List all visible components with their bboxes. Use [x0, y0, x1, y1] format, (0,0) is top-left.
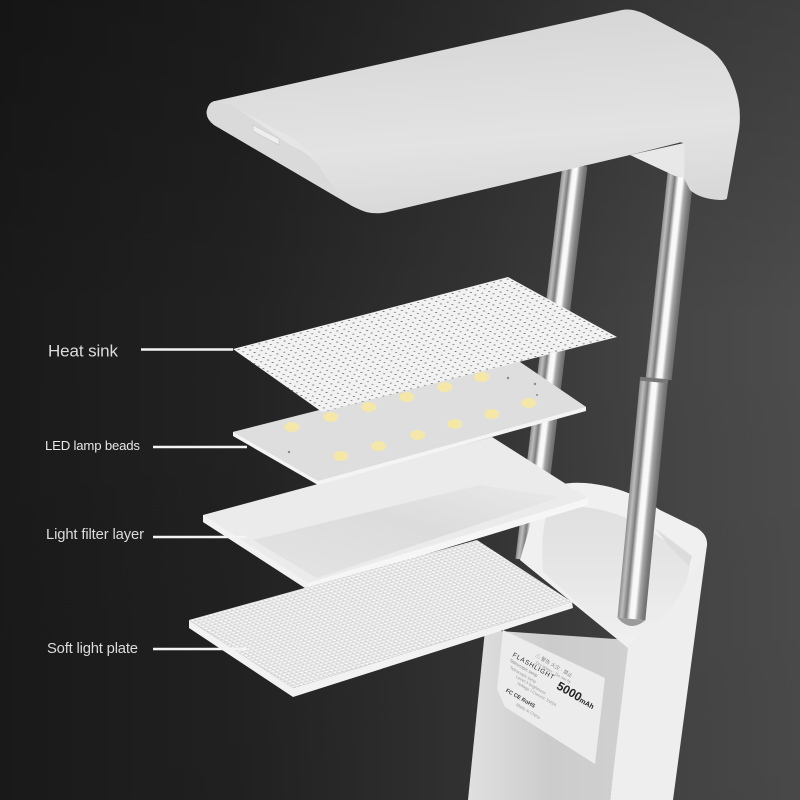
board screws	[288, 377, 538, 453]
heat sink mesh	[233, 277, 617, 412]
filter inner panel	[253, 485, 560, 578]
base top rim	[520, 483, 707, 648]
label origin: Made in China	[515, 702, 542, 720]
label: LED lamp beads: LED lamp beads	[45, 438, 140, 453]
soft light plate	[189, 540, 573, 697]
LED beads	[284, 372, 536, 461]
label: soft light plate: Soft light plate	[47, 641, 138, 657]
lamp base	[468, 483, 707, 800]
lower pole section	[617, 377, 668, 627]
label: heat sink: Heat sink	[48, 342, 118, 360]
lamp head	[207, 10, 740, 213]
head end highlight	[240, 110, 344, 200]
product label	[491, 630, 605, 764]
label details: Telescopic lamp	[508, 658, 539, 678]
head main shell	[207, 10, 740, 213]
label certifications: FC CE RoHS	[504, 688, 536, 710]
filter layer	[203, 437, 588, 590]
product label: Voltage / Current: 5V/2A	[516, 681, 558, 708]
head inner notch	[630, 143, 684, 178]
LED board	[233, 360, 586, 485]
label title: FLASHLIGHT	[511, 652, 556, 682]
right telescopic pole	[617, 169, 694, 627]
head left end face	[207, 101, 344, 200]
label: light filter layer: Light filter layer	[46, 527, 144, 543]
upper pole section	[646, 169, 694, 380]
left telescopic pole	[515, 164, 587, 562]
product label: Level 3 brightness	[515, 674, 547, 696]
filter side edge	[308, 498, 588, 590]
label warning: △ 警告 火灾 · 禁止	[534, 652, 574, 679]
base right face	[610, 545, 707, 800]
label capacity: 5000mAh	[554, 679, 598, 712]
head switch button	[253, 125, 279, 145]
base left face	[468, 630, 630, 800]
base cavity	[542, 506, 690, 636]
product label: Dry Water · Do not fly	[535, 660, 573, 685]
product label: Telescopic lamp	[509, 665, 538, 684]
base notch shadow	[655, 528, 692, 566]
